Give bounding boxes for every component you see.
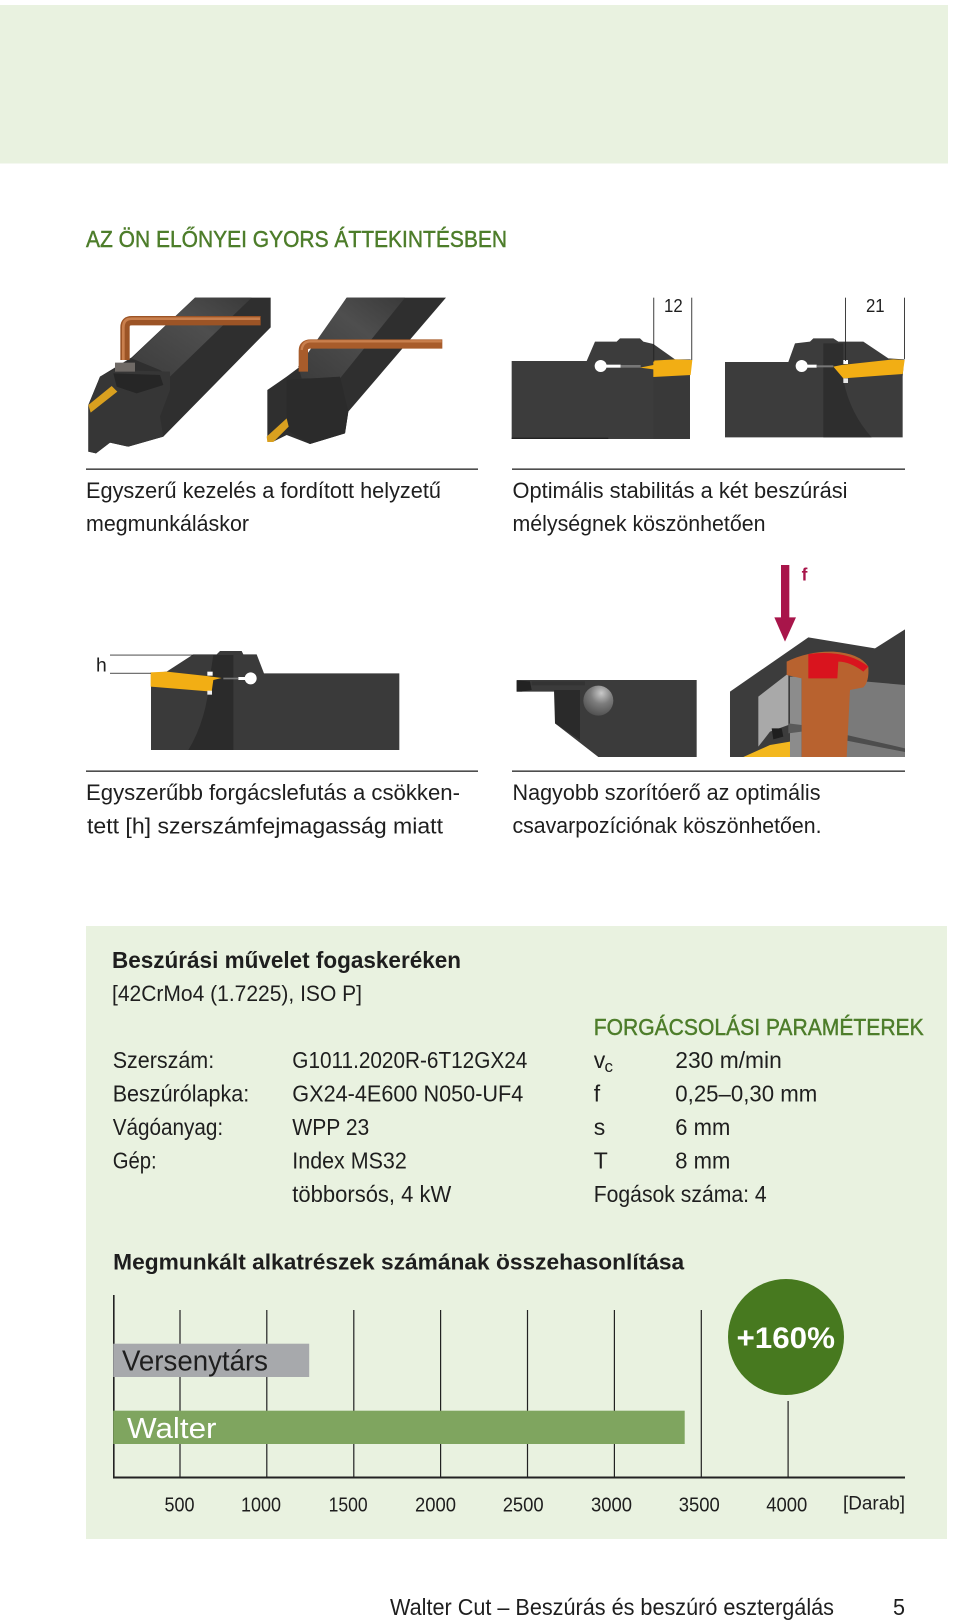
tool 21: 21 (866, 295, 885, 316)
tool 12: 12 (664, 295, 683, 316)
setup table: Vágóanyag: (113, 1114, 223, 1140)
tool holder right (267, 298, 446, 444)
axis labels: 3500 (679, 1494, 720, 1516)
bar: Walter (113, 1411, 685, 1445)
setup table: Szerszám: (113, 1047, 214, 1073)
bar: Walter: Walter (127, 1413, 217, 1445)
bar chart (113, 1279, 905, 1516)
cutting parameters: v (594, 1047, 606, 1073)
axis labels: 1500 (329, 1494, 368, 1516)
setup table (113, 1047, 527, 1207)
cutting parameters: T (594, 1148, 608, 1174)
image: tool with reduced head height h (96, 651, 399, 750)
caption: csavarpozíciónak köszönhetően. (512, 813, 822, 838)
caption: Optimális stabilitás a két beszúrási (512, 478, 848, 503)
cutting parameters: 230 m/min (675, 1047, 782, 1073)
cutting parameters: s (594, 1114, 605, 1140)
setup table: többorsós, 4 kW (292, 1181, 452, 1207)
divider (512, 770, 905, 772)
caption (512, 780, 822, 838)
caption (512, 478, 848, 536)
arrow f (774, 565, 796, 642)
cutting parameters: Fogások száma: 4 (594, 1181, 767, 1207)
caption: Nagyobb szorítóerő az optimális (512, 780, 820, 805)
callout: +160%: +160% (736, 1322, 835, 1355)
divider (86, 770, 478, 772)
tool holder left (88, 298, 271, 453)
setup table: Gép: (113, 1148, 157, 1174)
panel: chip flow (86, 651, 478, 838)
panel: clamping force (512, 565, 905, 838)
section view (730, 629, 905, 757)
title: AZ ÖN ELŐNYEI GYORS ÁTTEKINTÉSBEN (86, 226, 507, 252)
cutting parameters: 6 mm (675, 1114, 730, 1140)
label f: f (802, 565, 808, 585)
divider (86, 468, 478, 470)
cutting parameters: 8 mm (675, 1148, 730, 1174)
panel: stability (512, 295, 905, 536)
top green band (0, 5, 948, 164)
callout: +160% (728, 1279, 844, 1395)
setup table: Index MS32 (292, 1148, 407, 1174)
cutting parameters (594, 1047, 817, 1207)
panel background (86, 926, 947, 1539)
caption (86, 478, 441, 536)
caption: tett [h] szerszámfejmagasság miatt (87, 814, 444, 838)
image: two insert depths (512, 295, 905, 439)
axis labels: 2000 (415, 1494, 456, 1516)
caption (86, 780, 460, 838)
axis labels: 1000 (241, 1494, 281, 1516)
footer: 5 (893, 1594, 905, 1620)
axis labels: 3000 (591, 1494, 632, 1516)
material: [42CrMo4 (1.7225), ISO P] (112, 981, 362, 1006)
footer: Walter Cut – Beszúrás és beszúró esztergálás (390, 1594, 834, 1620)
tool 21 (725, 295, 905, 437)
caption: mélységnek köszönhetően (512, 511, 766, 536)
case heading: Beszúrási művelet fogaskeréken (112, 947, 461, 973)
setup table: WPP 23 (292, 1114, 369, 1140)
chart heading: Megmunkált alkatrészek számának összehasonlítása (113, 1250, 685, 1274)
axis labels (164, 1494, 905, 1516)
image: tool and section view (517, 565, 905, 757)
label h: h (96, 655, 107, 676)
tool 12 (512, 295, 692, 439)
tool side view (517, 680, 697, 757)
setup table: GX24-4E600 N050-UF4 (292, 1080, 523, 1106)
bar: Versenytárs: Versenytárs (122, 1346, 268, 1378)
panel: easy handling (86, 298, 478, 536)
axis labels: 4000 (766, 1494, 807, 1516)
caption: megmunkáláskor (86, 511, 249, 536)
panel: case study (86, 926, 947, 1539)
dimension lines (110, 655, 193, 674)
caption: Egyszerű kezelés a fordított helyzetű (86, 478, 441, 503)
axis labels: 2500 (503, 1494, 544, 1516)
setup table: G1011.2020R-6T12GX24 (292, 1047, 527, 1073)
cutting parameters heading: FORGÁCSOLÁSI PARAMÉTEREK (594, 1014, 924, 1040)
setup table: Beszúrólapka: (113, 1080, 249, 1106)
divider (512, 468, 905, 470)
cutting parameters: 0,25–0,30 mm (675, 1080, 817, 1106)
cutting parameters: f (594, 1080, 601, 1106)
image: two tool holders with hex keys (88, 298, 446, 453)
caption: Egyszerűbb forgácslefutás a csökken- (86, 780, 460, 805)
axis labels: [Darab] (843, 1494, 905, 1514)
axis labels: 500 (164, 1494, 194, 1516)
cutting parameters: c (604, 1057, 614, 1076)
